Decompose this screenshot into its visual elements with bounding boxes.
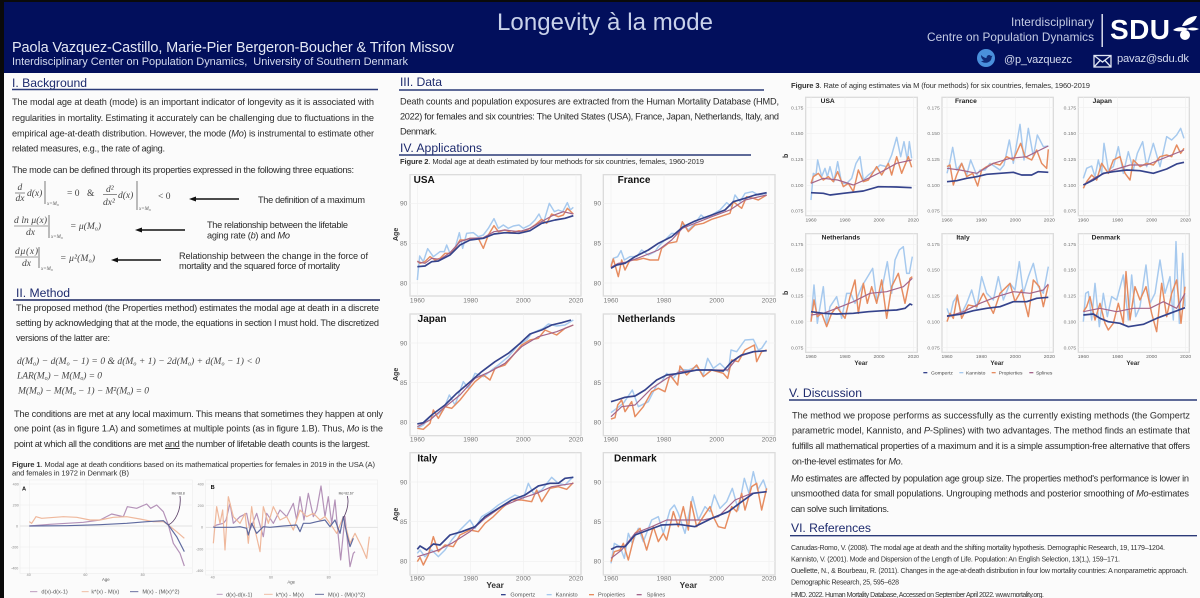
chart: rate of aging Japan: 1980 — [1112, 218, 1123, 224]
equation 1 — [15, 181, 171, 212]
chart: figure 1 A: A — [22, 487, 26, 493]
chart: rate of aging Denmark: 1980 — [1112, 354, 1123, 360]
legend: figure 3: Gompertz — [931, 370, 953, 376]
axis labels: b: b — [783, 154, 790, 158]
chart: modal age Denmark: 1960 — [604, 576, 619, 583]
axis labels: Age — [393, 228, 400, 521]
chart: rate of aging Denmark: 0.175 — [1064, 242, 1076, 248]
equation 3: dμ(x) — [15, 246, 38, 257]
chart: rate of aging France: 0.075 — [927, 209, 940, 215]
heading: data: III. Data — [400, 75, 442, 89]
legend: figure 2 — [501, 593, 665, 598]
chart: modal age Italy — [400, 453, 584, 590]
chart: modal age Italy: 1960 — [410, 576, 425, 583]
chart: figure 1 A: 60 — [83, 573, 87, 577]
chart: rate of aging Denmark: 0.150 — [1064, 268, 1076, 274]
chart: modal age Japan: 85 — [400, 380, 408, 387]
logo: divider — [1102, 14, 1103, 47]
chart: rate of aging France: 0.150 — [927, 131, 940, 137]
discretized equations: LAR(M — [17, 372, 45, 382]
affiliation: Interdisciplinary Center on Population Dynamics, University of Southern Denmark — [12, 56, 408, 68]
chart: rate of aging Japan — [1064, 97, 1191, 224]
chart: modal age France: 1960 — [604, 297, 619, 304]
discretized equations: + 1) − 2d(M — [136, 356, 189, 367]
heading: background: I. Background — [12, 76, 87, 90]
twitter handle: @p_vazquezc — [1004, 54, 1072, 66]
chart: figure 1 A: d(x)-d(x-1) — [41, 590, 68, 596]
chart: figure 1 A: 0 — [16, 524, 18, 528]
discretized equations: M(M — [18, 386, 37, 396]
panel: discussion — [789, 386, 1197, 514]
conditions text: The conditions are met at any local maximum. This means that sometimes they happen at only — [14, 409, 383, 419]
chart: rate of aging USA: USA — [821, 98, 835, 105]
chart: rate of aging Japan: 2000 — [1146, 218, 1157, 224]
chart: rate of aging USA: 1960 — [805, 218, 817, 224]
chart: modal age France: 85 — [594, 241, 601, 248]
background text — [12, 97, 374, 175]
chart: rate of aging Italy: 1960 — [941, 354, 953, 360]
chart: modal age Netherlands: 1960 — [604, 437, 619, 444]
chart: rate of aging Netherlands: Year — [854, 360, 868, 367]
reference list: Canudas-Romo, V. (2008). The modal age at death and the shifting mortality hypothesis. Demographic Research, 19, 1179–1204. — [791, 545, 1165, 552]
chart: figure 1 B: 80 — [327, 576, 331, 580]
discussion paragraph 1 — [792, 410, 1190, 466]
chart: modal age Denmark: 2020 — [762, 576, 777, 583]
chart: rate of aging France: France — [955, 98, 977, 105]
chart: modal age Denmark: 85 — [594, 519, 601, 526]
legend: figure 3: Propierties — [999, 370, 1023, 376]
chart: modal age Italy: 85 — [400, 519, 408, 526]
icon: twitter — [977, 49, 995, 67]
chart: modal age Denmark: 1980 — [657, 576, 672, 583]
equation 1: d² — [106, 185, 114, 195]
chart: rate of aging USA: 0.100 — [791, 183, 804, 189]
chart: rate of aging Netherlands: Netherlands — [822, 235, 860, 242]
discussion paragraph 1: fulfills all mathematical properties of a maximum and it is a simple assumption-free alternative that offers — [792, 441, 1190, 451]
chart: figure 1 B: Age — [287, 579, 296, 584]
equation 1: x=M — [139, 207, 149, 212]
chart: modal age USA: 80 — [400, 280, 408, 287]
legend: figure 3: Splines — [1036, 370, 1053, 376]
chart: modal age Denmark: 90 — [594, 479, 601, 486]
chart: rate of aging Italy — [927, 234, 1055, 367]
method text: versions of the latter are: — [16, 333, 110, 343]
discussion paragraph 1: parametric model, Kannisto, and P-Splines) with two advantages. The method finds an estimate that — [792, 426, 1190, 436]
figure 1 caption: Figure 1. Modal age at death conditions based on its mathematical properties for females in 2019 in the USA (A) — [12, 460, 375, 469]
chart: modal age Netherlands: Netherlands — [618, 314, 676, 325]
equation 3 — [15, 246, 95, 272]
chart: rate of aging Italy: Year — [990, 360, 1004, 367]
chart: figure 1 A: 40 — [27, 573, 31, 577]
chart: rate of aging Italy: 0.125 — [927, 294, 940, 300]
chart: rate of aging USA: 0.175 — [791, 105, 804, 111]
chart: rate of aging Italy: 0.075 — [927, 345, 940, 351]
heading: method: II. Method — [16, 286, 70, 300]
note: force of mortality: Relationship between the change in the force of — [179, 251, 368, 261]
axis labels: b: b — [783, 291, 790, 295]
heading: applications: IV. Applications — [400, 141, 482, 155]
axis labels: Age: Age — [393, 508, 400, 521]
arrow 3 — [111, 258, 161, 262]
equation 1: d(x) — [118, 190, 133, 201]
chart: rate of aging Denmark: 0.125 — [1064, 294, 1076, 300]
discretized equations: ) − M(M — [47, 370, 81, 382]
chart: rate of aging Denmark: 2000 — [1146, 354, 1157, 360]
discretized equations: o — [133, 362, 136, 368]
discretized equations: − 1) − M²(M — [76, 386, 128, 396]
panel: method — [11, 286, 383, 598]
chart: rate of aging Denmark: 2020 — [1180, 354, 1191, 360]
chart: modal age Denmark — [594, 453, 777, 590]
chart: figure 1 A: Age — [102, 577, 110, 582]
legend: figure 3: Kannisto — [966, 370, 986, 376]
arrow 2 — [135, 228, 185, 232]
chart: modal age Denmark: Denmark — [614, 453, 657, 464]
chart: modal age Japan: 2020 — [569, 437, 584, 444]
chart: figure 1 B: 200 — [198, 504, 204, 508]
chart: rate of aging Japan: 0.175 — [1064, 105, 1076, 111]
chart: figure 1 B: 40 — [211, 576, 215, 580]
chart: rate of aging Denmark: 1960 — [1078, 354, 1089, 360]
chart: figure 1 A: 80 — [141, 573, 145, 577]
chart: figure 1 A: -400 — [11, 566, 18, 570]
discussion paragraph 2: Mo estimates are affected by population age group size. The properties method's performance is lower in — [791, 474, 1189, 484]
chart: rate of aging Italy: 0.150 — [927, 268, 940, 274]
chart: modal age Italy: Year — [486, 580, 505, 590]
chart: rate of aging USA: 2020 — [908, 218, 919, 224]
discretized equations: o — [222, 362, 225, 368]
chart: rate of aging Netherlands: 0.150 — [791, 268, 804, 274]
panel: data — [399, 75, 779, 136]
chart: rate of aging Japan: 0.125 — [1064, 157, 1076, 163]
chart: rate of aging Italy: 0.175 — [927, 242, 940, 248]
chart: rate of aging Italy: 1980 — [976, 354, 987, 360]
reference list: Ouellette, N., & Bourbeau, R. (2011). Changes in the age-at-death distribution in four low mortality countries: A nonparametric approach. — [791, 568, 1188, 575]
equation 1: = 0 — [67, 189, 80, 199]
chart: modal age France: 2000 — [709, 297, 724, 304]
chart: modal age Japan: 1960 — [410, 437, 425, 444]
panel: figure 3 — [783, 81, 1191, 376]
discretized equations: ) − d(M — [35, 356, 68, 367]
chart: modal age USA: USA — [414, 175, 435, 186]
chart: modal age Netherlands: 2020 — [762, 437, 777, 444]
conditions text: one point (as in figure 1.A) and sometimes at multiple points (as in figure 1.B). Thus, Mo is the — [14, 424, 383, 434]
reference list: Demographic Research, 25, 595–628 — [791, 580, 899, 586]
chart: rate of aging USA — [791, 97, 919, 224]
chart: rate of aging Italy: Italy — [956, 235, 970, 242]
chart: figure 1 A: Mo=88.8 — [172, 492, 185, 496]
chart: modal age Denmark: 80 — [594, 559, 601, 566]
discretized equations — [16, 356, 260, 397]
data text — [400, 96, 779, 136]
chart: rate of aging Japan: 0.100 — [1064, 183, 1076, 189]
chart: rate of aging Denmark — [1064, 234, 1191, 367]
panel: applications — [393, 141, 777, 598]
figure 2 caption: Figure 2. Modal age at death estimated by four methods for six countries, females, 1960-2019 — [400, 157, 704, 166]
note: lifetable aging rate: The relationship between the lifetable — [207, 220, 348, 230]
chart: modal age Japan: 80 — [400, 420, 408, 427]
chart: modal age Italy: 2020 — [569, 576, 584, 583]
chart: rate of aging Denmark: Denmark — [1092, 235, 1120, 242]
heading: references: VI. References — [791, 521, 871, 535]
chart: rate of aging Netherlands: 1960 — [805, 354, 817, 360]
method text: setting by acknowledging that at the mode, the equations in section I must hold. The discretized — [16, 318, 379, 328]
chart: rate of aging France: 0.175 — [927, 105, 940, 111]
chart: rate of aging France: 0.100 — [927, 183, 940, 189]
note: force of mortality — [179, 251, 368, 271]
discretized equations: o — [188, 362, 191, 368]
chart: modal age France: 90 — [594, 201, 601, 208]
discretized equations: o — [33, 362, 36, 368]
equation 3: ) — [91, 253, 95, 264]
note: force of mortality: mortality and the squared force of mortality — [179, 261, 340, 271]
discretized equations: ) + d(M — [190, 356, 223, 367]
chart: modal age Japan — [400, 314, 584, 444]
chart: rate of aging Netherlands: 2020 — [908, 354, 919, 360]
chart: modal age France: France — [618, 175, 651, 186]
chart: rate of aging Japan: 1960 — [1078, 218, 1089, 224]
chart: modal age Netherlands: 85 — [594, 380, 601, 387]
email: pavaz@sdu.dk — [1117, 53, 1189, 65]
equation 1: dx — [16, 194, 25, 204]
chart: rate of aging USA: 1980 — [839, 218, 851, 224]
discretized equations: o — [67, 362, 70, 368]
chart: figure 1 A — [11, 480, 192, 596]
chart: modal age Japan: 2000 — [516, 437, 531, 444]
chart: modal age USA: 1960 — [410, 297, 425, 304]
equation 2: ) — [97, 221, 101, 232]
chart: modal age USA: 1980 — [463, 297, 478, 304]
chart: modal age Denmark: 2000 — [709, 576, 724, 583]
equation 3: o — [51, 267, 53, 272]
arrow 1 — [189, 196, 239, 202]
chart: rate of aging Japan: Japan — [1093, 98, 1112, 105]
equation 1: & — [87, 189, 95, 199]
chart: rate of aging Netherlands: 0.125 — [791, 294, 804, 300]
data text: Denmark. — [400, 126, 437, 136]
equation 2: d ln μ(x) — [14, 215, 47, 226]
equation 2: x=M — [51, 235, 61, 240]
chart: modal age USA: 2000 — [516, 297, 531, 304]
chart: rate of aging France: 2020 — [1044, 218, 1055, 224]
chart: figure 1 B: Mo=82.67 — [339, 492, 354, 496]
axis labels: b — [783, 154, 790, 295]
chart: figure 1 B: B — [211, 485, 215, 491]
chart: rate of aging Italy: 2020 — [1044, 354, 1055, 360]
chart: rate of aging USA: 0.075 — [791, 209, 804, 215]
logo: centre name: Centre on Population Dynamics — [927, 30, 1094, 44]
chart: rate of aging France: 0.125 — [927, 157, 940, 163]
chart: figure 1 B: 60 — [269, 576, 273, 580]
reference list: Kannisto, V. (2001). Mode and Dispersion of the Length of Life. Population: An English Selection, 13(1,), 159–171. — [791, 556, 1120, 564]
equation 1: dx² — [103, 198, 115, 208]
chart: modal age Japan: 1980 — [463, 437, 478, 444]
chart: modal age France: 80 — [594, 280, 601, 287]
method text — [16, 303, 379, 343]
chart: modal age USA: 90 — [400, 201, 408, 208]
chart: rate of aging Netherlands: 0.175 — [791, 242, 804, 248]
chart: modal age Netherlands: 90 — [594, 340, 601, 347]
chart: modal age Netherlands: 80 — [594, 420, 601, 427]
chart: rate of aging Denmark: Year — [1126, 360, 1140, 367]
equation 1: o — [149, 207, 151, 212]
chart: rate of aging France: 2000 — [1010, 218, 1021, 224]
discretized equations: ) = 0 — [82, 370, 102, 382]
chart: rate of aging Japan: 2020 — [1180, 218, 1191, 224]
background text: related measures, e.g., the rate of aging. — [12, 144, 165, 154]
logo: centre name: Interdisciplinary — [1011, 15, 1094, 29]
discussion paragraph 2: can solve such limitations. — [791, 504, 889, 514]
chart: modal age France — [594, 175, 777, 304]
data text: 2022) for females and six countries: The United States (USA), France, Japan, Netherlands, Italy, and — [400, 112, 779, 122]
equation 3: x=M — [41, 267, 51, 272]
figure 1 caption — [12, 460, 375, 478]
axis labels: Age: Age — [393, 228, 400, 241]
chart: rate of aging USA: 0.150 — [791, 131, 804, 137]
chart: rate of aging Japan: 0.150 — [1064, 131, 1076, 137]
discretized equations: o — [73, 391, 76, 397]
chart: rate of aging France: 1960 — [941, 218, 953, 224]
reference list — [791, 545, 1188, 598]
discussion paragraph 1: on-the-level estimates for Mo. — [792, 456, 903, 466]
chart: modal age Japan: Japan — [418, 314, 447, 325]
note: lifetable aging rate — [207, 220, 348, 240]
chart: figure 1 B: -400 — [196, 569, 203, 573]
chart: modal age Netherlands: 2000 — [709, 437, 724, 444]
chart: rate of aging Netherlands: 2000 — [873, 354, 885, 360]
conditions text: point at which all the conditions are met and the number of lifetable death counts is the largest. — [14, 439, 370, 449]
chart: figure 1 A: 200 — [13, 503, 19, 507]
chart: figure 1 B: -200 — [196, 547, 203, 551]
discretized equations: d(M — [17, 357, 33, 367]
chart: rate of aging Denmark: 0.075 — [1064, 345, 1076, 351]
chart: modal age Italy: 2000 — [516, 576, 531, 583]
chart: modal age USA — [400, 175, 584, 304]
panel: background — [12, 76, 378, 272]
background text: empirical age-at-death distribution. However, the mode (Mo) is instrumental to estimate other — [12, 128, 374, 138]
chart: figure 1 B — [196, 480, 378, 598]
equation 2: = μ(M — [70, 222, 95, 232]
equation 1: < 0 — [158, 192, 171, 202]
header banner — [0, 0, 1200, 73]
figure 3 caption: Figure 3. Rate of aging estimates via M (four methods) for six countries, females, 1960-2019 — [791, 81, 1090, 90]
chart: modal age Netherlands — [594, 314, 777, 444]
chart: modal age Japan: 90 — [400, 340, 408, 347]
axis labels: Age: Age — [393, 368, 400, 381]
equation 2: o — [95, 226, 98, 232]
heading: discussion: V. Discussion — [789, 386, 862, 400]
chart: figure 1 A: M(x) - (M(x)^2) — [142, 590, 180, 596]
background text: regularities in mortality. Estimating it accurately can be challenging due to fluctuations in the — [12, 113, 374, 123]
chart: rate of aging Italy: 2000 — [1010, 354, 1021, 360]
chart: figure 1 A: -200 — [11, 545, 18, 549]
equation 2 — [14, 215, 101, 240]
data text: Death counts and population exposures are extracted from the Human Mortality Database (HMD, — [400, 96, 779, 106]
discretized equations: o — [45, 376, 48, 382]
chart: modal age Italy: Italy — [417, 453, 438, 464]
discretized equations: o — [127, 391, 130, 397]
equation 1: d(x) — [27, 188, 42, 199]
conditions text — [14, 409, 383, 449]
chart: rate of aging Denmark: 0.100 — [1064, 319, 1076, 325]
equation 3: dx — [22, 259, 32, 269]
equation 1: o — [57, 202, 59, 207]
discussion paragraph 1: The method we propose performs as successfully as the currently existing methods (the Gompertz — [792, 410, 1190, 420]
chart: rate of aging Japan: 0.075 — [1064, 209, 1076, 215]
discretized equations: ) = 0 — [129, 386, 149, 396]
chart: modal age France: 1980 — [657, 297, 672, 304]
note: lifetable aging rate: aging rate (b) and Mo — [207, 230, 290, 240]
title: Longevity à la mode — [497, 9, 713, 36]
authors: Paola Vazquez-Castillo, Marie-Pier Bergeron-Boucher & Trifon Missov — [12, 40, 455, 56]
background text: The mode can be defined through its properties expressed in the following three equations: — [12, 165, 354, 175]
chart: modal age USA: 2020 — [569, 297, 584, 304]
chart: figure 1 A: 400 — [13, 482, 19, 486]
icon: mail — [1094, 56, 1111, 67]
chart: figure 1 B: 0 — [201, 526, 203, 530]
chart: rate of aging France: 1980 — [976, 218, 987, 224]
equation 3: = μ²(M — [60, 254, 88, 264]
discretized equations: o — [37, 391, 40, 397]
chart: rate of aging Netherlands: 1980 — [839, 354, 851, 360]
chart: rate of aging France — [927, 97, 1055, 224]
equation 1: x=M — [47, 202, 57, 207]
logo: centre name — [927, 15, 1094, 44]
discussion paragraph 2: unsmoothed data for small populations. Ungrouping methods and posterior smoothing of Mo-estimates — [791, 488, 1189, 498]
discretized equations: ) − M(M — [39, 386, 74, 396]
chart: modal age Denmark: Year — [680, 580, 698, 590]
chart: rate of aging Netherlands — [791, 234, 919, 367]
chart: rate of aging USA: 2000 — [873, 218, 885, 224]
panel: references — [790, 521, 1197, 598]
equation 2: dx — [26, 228, 36, 238]
figure 1 caption: and females in 1972 in Denmark (B) — [12, 468, 129, 478]
method text: The proposed method (the Properties method) estimates the modal age at death in a discrete — [16, 303, 379, 313]
chart: modal age USA: 85 — [400, 241, 408, 248]
discretized equations: − 1) = 0 & d(M — [70, 356, 134, 367]
chart: rate of aging Netherlands: 0.075 — [791, 345, 804, 351]
logo: SDU: SDU — [1110, 14, 1170, 45]
equation 3: o — [89, 258, 92, 264]
chart: modal age Italy: 80 — [400, 559, 408, 566]
chart: modal age Italy: 1980 — [463, 576, 478, 583]
discretized equations: o — [80, 376, 83, 382]
equation 2: o — [61, 235, 63, 240]
discussion paragraph 2 — [791, 474, 1189, 514]
chart: modal age Italy: 90 — [400, 479, 408, 486]
icon: SDU apple branch — [1173, 16, 1199, 40]
chart: rate of aging Italy: 0.100 — [927, 319, 940, 325]
legend: figure 3 — [923, 370, 1053, 376]
discretized equations: − 1) < 0 — [225, 356, 260, 367]
background text: The modal age at death (mode) is an important indicator of longevity as it is associated with — [12, 97, 374, 107]
equation 1: d — [18, 183, 22, 193]
chart: figure 1 B: 400 — [198, 482, 204, 486]
chart: rate of aging USA: 0.125 — [791, 157, 804, 163]
note: definition of a maximum: The definition of a maximum — [258, 195, 365, 205]
chart: modal age France: 2020 — [762, 297, 777, 304]
chart: modal age Netherlands: 1980 — [657, 437, 672, 444]
chart: rate of aging Netherlands: 0.100 — [791, 319, 804, 325]
chart: figure 1 A: k*(x) - M(x) — [91, 590, 119, 596]
